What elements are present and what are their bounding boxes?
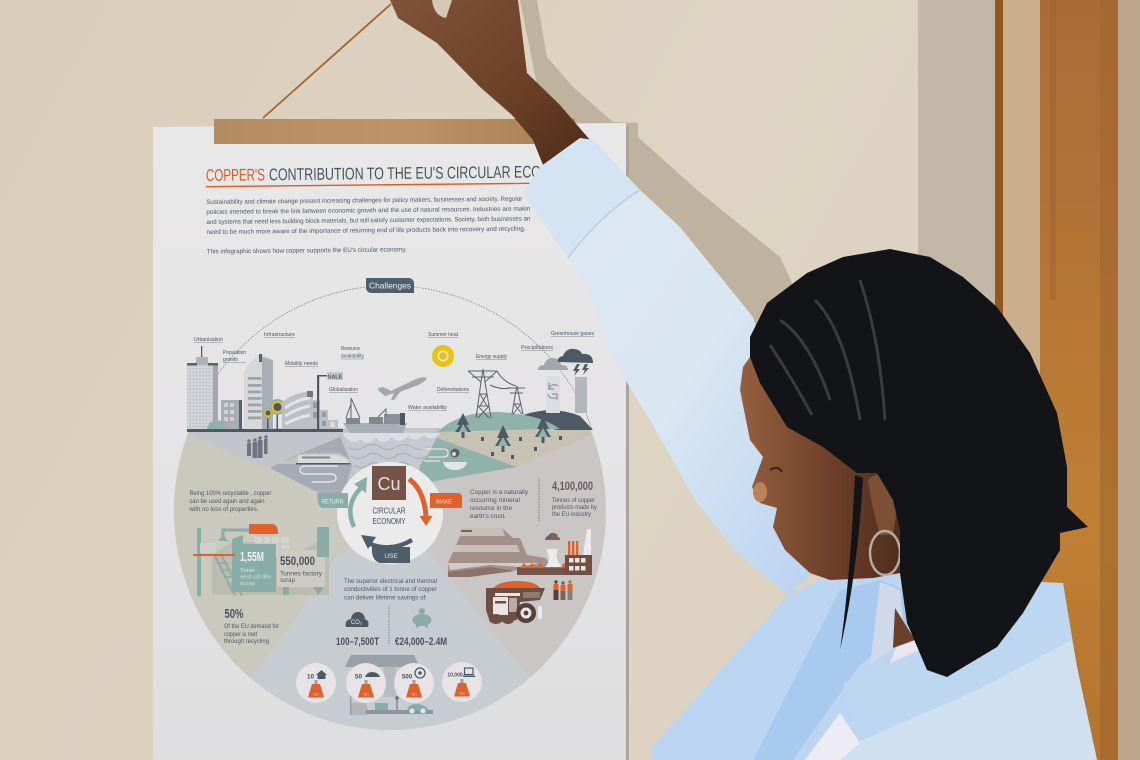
challenge labels: Urbanisation	[194, 337, 223, 343]
text: recyclable: Being 100% recyclable , copper	[190, 490, 272, 497]
title rule	[206, 183, 534, 187]
stat: 550,000: scrap	[280, 577, 295, 584]
illustration: cargo ship	[343, 398, 407, 433]
text: recyclable: can be used again and again	[190, 498, 265, 505]
illustration: open-pit mine	[448, 528, 555, 577]
icon: CO2 cloud: CO₂	[351, 620, 363, 626]
intro text	[206, 196, 531, 255]
wooden hanger rod	[214, 119, 575, 144]
challenges pill: Challenges	[369, 280, 411, 290]
icon: people	[247, 435, 268, 458]
challenge labels: growth	[223, 357, 238, 363]
illustration: refinery	[517, 529, 592, 575]
stat: 50%: Of the EU demand for	[224, 623, 280, 630]
white undershirt	[805, 713, 860, 760]
hanging string	[263, 4, 391, 118]
illustration: mining truck	[486, 581, 545, 624]
wheel diagram	[174, 428, 606, 730]
icon: water cycle panel	[546, 376, 560, 413]
intro text: policies intended to break the link between economic growth and the use of natural resources. Industries are makin	[206, 206, 531, 216]
teal field	[419, 438, 517, 482]
stat: 550,000: Tonnes factory	[280, 570, 323, 578]
arrow: return: RETURN	[322, 498, 344, 506]
stat: 4,100,000	[552, 479, 598, 518]
dashed challenges arc	[218, 287, 592, 429]
text: mineral resource: earth's crust.	[470, 513, 506, 520]
arrow: return	[317, 477, 367, 527]
text: recyclable: with no loss of properties.	[189, 506, 259, 513]
title: COPPER'S	[206, 165, 265, 185]
stat: 50%	[224, 606, 280, 645]
text: conductivity	[344, 578, 438, 602]
intro text: This infographic shows how copper supports the EU's circular economy.	[207, 246, 407, 255]
stat: 50%: copper is met	[224, 631, 257, 638]
challenge labels: Energy supply	[476, 354, 507, 360]
challenge labels: Infrastructure	[264, 332, 295, 338]
poster edge shadow	[626, 126, 629, 760]
icon: sale sign: SALE	[328, 374, 343, 380]
text: mineral resource: occurring mineral	[470, 497, 520, 504]
lower shirt front	[840, 640, 1097, 760]
arm shadow on wall	[520, 0, 800, 400]
slate valley	[270, 437, 352, 493]
wall return in shadow	[918, 0, 996, 760]
text: recyclable	[189, 490, 272, 513]
text: conductivity: can deliver lifetime savings of:	[344, 594, 427, 602]
icon: bush	[207, 421, 225, 429]
icon: tall building	[187, 346, 218, 429]
sector: bottom use	[251, 548, 528, 730]
illustration: train	[278, 453, 350, 464]
icon: CO2 cloud	[346, 612, 369, 627]
stat: 550,000: 550,000	[280, 554, 315, 568]
challenge labels: Resource	[341, 346, 360, 352]
circle: 10 houses: 10	[307, 674, 314, 680]
circle: 10,000 computers: Cu	[459, 690, 465, 696]
text: mineral resource	[470, 489, 529, 520]
illustration: electricity pylons	[468, 369, 525, 418]
stat: euro savings: €24,000–2.4M	[395, 636, 447, 648]
wooden door frame	[995, 0, 1140, 760]
circle: 10 houses	[296, 663, 336, 703]
stat: 4,100,000: Tonnes of copper	[552, 497, 596, 504]
ear	[868, 474, 896, 535]
stat: 1.55M: scrap	[240, 581, 255, 587]
Cu element tile	[372, 466, 406, 500]
nose highlight	[753, 482, 767, 502]
text: mineral resource: resource in the	[470, 505, 512, 512]
water	[419, 432, 438, 470]
intro text: need to be much more aware of the importance of returning end of life products back into recovery and recycling.	[207, 226, 526, 236]
earring	[870, 531, 900, 575]
arrow: make: MAKE	[436, 498, 452, 506]
challenge labels: Greenhouse gases	[551, 331, 594, 337]
land band	[437, 429, 592, 467]
stat: 1.55M: Tonnes	[240, 568, 255, 574]
greenhouse column	[575, 377, 587, 413]
neck and face	[740, 357, 910, 580]
illustration: aeroplane	[378, 377, 427, 400]
text: conductivity: conductivities of 1 tonne of copper	[344, 586, 438, 593]
sector: left recycling	[174, 434, 351, 678]
stat: 50%: 50%	[224, 606, 244, 621]
sector: top grey	[176, 428, 440, 486]
challenges pill	[366, 278, 414, 293]
hub label	[372, 506, 406, 526]
icon: clouds and lightning	[538, 349, 593, 376]
panel: recycling	[189, 490, 329, 645]
hub label: ECONOMY	[372, 517, 406, 526]
panel: use	[296, 578, 482, 715]
arrow: make	[409, 479, 462, 526]
circle: 10 houses: Cu	[313, 692, 319, 696]
illustration: city	[187, 346, 343, 432]
circle: 10,000 computers: 10,000	[447, 672, 463, 678]
circle: 500 fans	[394, 663, 434, 703]
stat: 550,000	[280, 554, 323, 584]
icon: low building	[221, 400, 242, 429]
illustration: house	[345, 655, 433, 715]
hub label: CIRCULAR	[372, 506, 406, 516]
challenge labels: Mobility needs	[285, 361, 318, 367]
challenge labels: Population	[223, 350, 246, 356]
challenge labels: Deforestations	[437, 387, 469, 393]
illustration: river squiggle	[300, 466, 338, 482]
stat: 4,100,000: products made by	[552, 504, 598, 511]
challenge labels: Globalisation	[329, 387, 358, 393]
icon: sale sign	[317, 372, 343, 430]
arrow: use: USE	[384, 553, 398, 560]
icon: summer heat sun	[432, 345, 454, 367]
circle: 500 fans: Cu	[411, 692, 417, 696]
icon: workers	[554, 580, 572, 600]
stat: 50%: through recycling	[224, 638, 269, 645]
challenge labels: availability	[341, 354, 364, 360]
poster header	[206, 162, 542, 255]
stat: 4,100,000: the EU industry	[552, 511, 592, 518]
stat: 1.55M	[240, 550, 271, 587]
circle: 50 cars: 50	[355, 674, 362, 680]
challenge labels: Precipitations	[521, 345, 553, 351]
illustration: water tap and drop	[423, 448, 467, 470]
circle: 50 cars	[346, 663, 386, 703]
icon: tower	[244, 353, 273, 429]
Cu element tile: Cu	[377, 474, 401, 494]
intro text: and systems that need less building block materials, but still satisfy customer expectations. Society, both businesses an	[206, 216, 531, 226]
panel: make	[448, 478, 598, 624]
challenge labels: Summer heat	[428, 332, 458, 338]
woman's hair	[750, 249, 1088, 677]
intro text: Sustainability and climate change present increasing challenges for policy makers, businesses and society. Regular	[206, 196, 523, 206]
circular economy hub	[317, 462, 462, 564]
icon: curved office building	[282, 391, 338, 429]
illustration: hills	[437, 410, 593, 432]
circle: 10,000 computers	[442, 662, 482, 702]
woman's raised hand and forearm	[390, 0, 590, 170]
icon: yellow trees	[262, 399, 286, 430]
circle: 50 cars: Cu	[363, 692, 369, 696]
icon: piggy bank	[412, 608, 432, 628]
icon: trees and stumps	[455, 413, 562, 459]
sector: right make	[426, 436, 606, 678]
stat: 1.55M: end-of-life	[240, 574, 271, 580]
arrow: use	[361, 535, 412, 563]
illustration: smelter	[193, 524, 329, 596]
circle: 500 fans: 500	[402, 674, 413, 680]
challenge labels: Water availability	[408, 405, 447, 411]
challenge labels	[194, 331, 594, 411]
stat: CO2 savings: 100–7,500T	[336, 636, 379, 648]
collar	[843, 583, 1072, 743]
text: conductivity: The superior electrical and thermal	[344, 578, 437, 585]
shirt sleeve	[523, 138, 810, 595]
stat: 4,100,000: 4,100,000	[552, 479, 593, 493]
stat: 1.55M: 1,55M	[240, 550, 264, 564]
poster sheet	[153, 123, 630, 760]
text: mineral resource: Copper is a naturally	[470, 489, 529, 496]
shirt body	[651, 575, 1097, 760]
poster header: CONTRIBUTION TO THE EU'S CIRCULAR ECO	[269, 162, 541, 184]
